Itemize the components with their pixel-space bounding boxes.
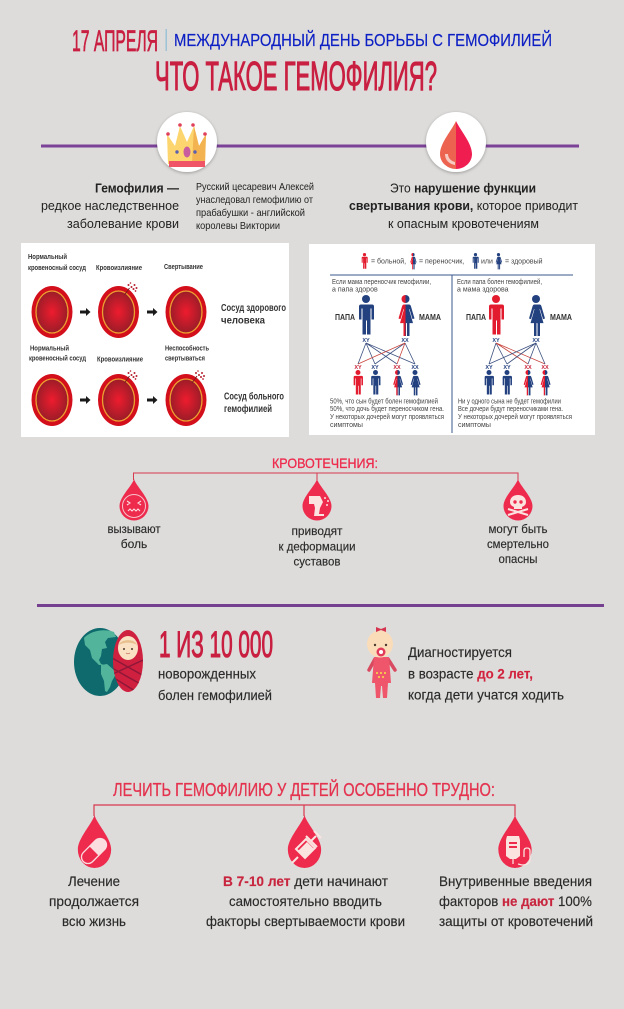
- text: tsarevich Alexei: унаследовал гемофилию от: [196, 194, 313, 206]
- icon: blood drop: [426, 112, 486, 172]
- heading: bleeding: КРОВОТЕЧЕНИЯ:: [272, 456, 378, 471]
- text: clotting disorder: свертывания крови, которое приводит: [349, 198, 578, 213]
- item: deadly: [487, 479, 549, 566]
- title: date: 17 АПРЕЛЯ: [72, 25, 158, 58]
- icon: globe and newborn: [74, 628, 144, 696]
- item: deadly: смертельно: [487, 537, 549, 551]
- panel: inheritance diagram: XX: [532, 338, 540, 344]
- panel: inheritance diagram: МАМА: [550, 313, 572, 322]
- panel: inheritance diagram: = здоровый: [505, 258, 543, 266]
- panel: inheritance diagram: 50%, что сын будет болен гемофилией: [330, 398, 438, 406]
- panel: vessels diagram: человека: [221, 314, 265, 326]
- panel: inheritance diagram: XY: [354, 365, 362, 371]
- item: joints: к деформации: [278, 540, 356, 554]
- text: clotting disorder: [349, 180, 578, 231]
- panel: inheritance diagram: XY: [503, 365, 511, 371]
- item: deadly: опасны: [498, 552, 538, 566]
- statistic: one in 10000: болен гемофилией: [158, 687, 272, 703]
- item: pain: вызывают: [108, 522, 161, 536]
- statistic: one in 10000: 1 ИЗ 10 000: [159, 624, 273, 665]
- text: tsarevich Alexei: [196, 181, 314, 232]
- panel: vessels diagram: свертываться: [165, 354, 205, 362]
- panel: vessels diagram: гемофилией: [224, 403, 272, 415]
- panel: inheritance diagram: 50%, что дочь будет переносчиком гена.: [330, 405, 444, 413]
- panel: vessels diagram: Нормальный: [28, 252, 67, 261]
- item: self-injection: В 7-10 лет дети начинают: [223, 873, 389, 889]
- panel: inheritance diagram: а папа здоров: [332, 286, 378, 294]
- panel: inheritance diagram: = переносчик,: [419, 258, 464, 266]
- item: joints: [278, 479, 356, 568]
- text: definition: [41, 180, 179, 231]
- panel: vessels diagram: Неспособность: [165, 344, 209, 352]
- panel: inheritance diagram: Если мама переносчик гемофилии,: [332, 279, 431, 286]
- icon: baby girl: [367, 627, 395, 698]
- item: lifelong treatment: Лечение: [68, 873, 120, 889]
- panel: inheritance diagram: У некоторых дочерей могут проявляться: [330, 413, 444, 421]
- item: lifelong treatment: [49, 815, 139, 929]
- item: self-injection: [206, 815, 405, 929]
- panel: vessels diagram: [21, 243, 289, 437]
- panel: inheritance diagram: XY: [485, 365, 493, 371]
- text: tsarevich Alexei: прабабушки - английской: [196, 207, 305, 219]
- panel: inheritance diagram: XX: [524, 365, 532, 371]
- item: lifelong treatment: продолжается: [49, 893, 139, 909]
- panel: inheritance diagram: XX: [411, 365, 419, 371]
- text: clotting disorder: к опасным кровотечениям: [388, 216, 539, 231]
- icon: crown: [157, 112, 217, 172]
- panel: inheritance diagram: Все дочери будут переносчиками гена.: [458, 405, 563, 413]
- text: diagnosis: в возрасте до 2 лет,: [408, 666, 533, 682]
- panel: inheritance diagram: а мама здорова: [457, 286, 509, 294]
- panel: inheritance diagram: XY: [362, 338, 370, 344]
- panel: inheritance diagram: XY: [371, 365, 379, 371]
- item: joints: приводят: [292, 524, 343, 538]
- panel: inheritance diagram: ПАПА: [335, 313, 355, 322]
- item: deadly: могут быть: [488, 522, 548, 536]
- heading: treatment: ЛЕЧИТЬ ГЕМОФИЛИЮ У ДЕТЕЙ ОСОБЕННО ТРУДНО:: [113, 779, 495, 800]
- text: tsarevich Alexei: Русский цесаревич Алексей: [196, 181, 314, 193]
- item: self-injection: самостоятельно вводить: [229, 893, 382, 909]
- panel: inheritance diagram: Если папа болен гемофилией,: [457, 278, 542, 286]
- item: pain: боль: [121, 537, 147, 551]
- panel: vessels diagram: Сосуд больного: [224, 390, 284, 402]
- panel: inheritance diagram: XX: [393, 365, 401, 371]
- item: pain: [108, 479, 161, 551]
- text: definition: редкое наследственное: [41, 198, 179, 213]
- panel: inheritance diagram: Ни у одного сына не будет гемофилии: [458, 398, 561, 406]
- item: infusions: Внутривенные введения: [439, 873, 592, 889]
- panel: vessels diagram: кровеносный сосуд: [29, 354, 86, 362]
- panel: inheritance diagram: XX: [401, 338, 409, 344]
- panel: vessels diagram: Кровоизлияние: [97, 354, 143, 364]
- panel: inheritance diagram: XX: [541, 365, 549, 371]
- statistic: one in 10000: [158, 624, 273, 703]
- panel: inheritance diagram: МАМА: [419, 313, 441, 322]
- panel: inheritance diagram: XY: [492, 338, 500, 344]
- item: self-injection: факторы свертываемости крови: [206, 913, 405, 929]
- panel: vessels diagram: Кровоизлияние: [96, 263, 142, 272]
- text: diagnosis: когда дети учатся ходить: [408, 686, 564, 702]
- text: clotting disorder: Это нарушение функции: [390, 180, 536, 196]
- panel: inheritance diagram: = больной,: [371, 258, 406, 266]
- title: international day: МЕЖДУНАРОДНЫЙ ДЕНЬ БОРЬБЫ С ГЕМОФИЛИЕЙ: [174, 29, 552, 50]
- statistic: one in 10000: новорожденных: [158, 666, 256, 682]
- panel: inheritance diagram: ПАПА: [466, 313, 486, 322]
- item: infusions: [439, 815, 593, 929]
- item: joints: суставов: [294, 554, 340, 568]
- panel: vessels diagram: Нормальный: [30, 344, 69, 352]
- item: lifelong treatment: всю жизнь: [62, 913, 126, 929]
- text: diagnosis: Диагностируется: [408, 644, 512, 660]
- text: tsarevich Alexei: королевы Виктории: [196, 220, 280, 232]
- panel: vessels diagram: кровеносный сосуд: [28, 263, 86, 272]
- item: infusions: факторов не дают 100%: [439, 893, 592, 909]
- panel: inheritance diagram: симптомы: [330, 422, 363, 429]
- item: infusions: защиты от кровотечений: [439, 913, 593, 929]
- panel: inheritance diagram: [309, 244, 595, 435]
- panel: vessels diagram: Свертывание: [164, 262, 203, 271]
- text: definition: Гемофилия —: [95, 180, 179, 196]
- panel: vessels diagram: Сосуд здорового: [221, 302, 286, 314]
- text: diagnosis: [408, 644, 564, 702]
- panel: inheritance diagram: симптомы: [458, 422, 491, 429]
- panel: inheritance diagram: У некоторых дочерей могут проявляться: [458, 413, 572, 421]
- panel: inheritance diagram: или: [481, 258, 493, 266]
- text: definition: заболевание крови: [67, 216, 179, 231]
